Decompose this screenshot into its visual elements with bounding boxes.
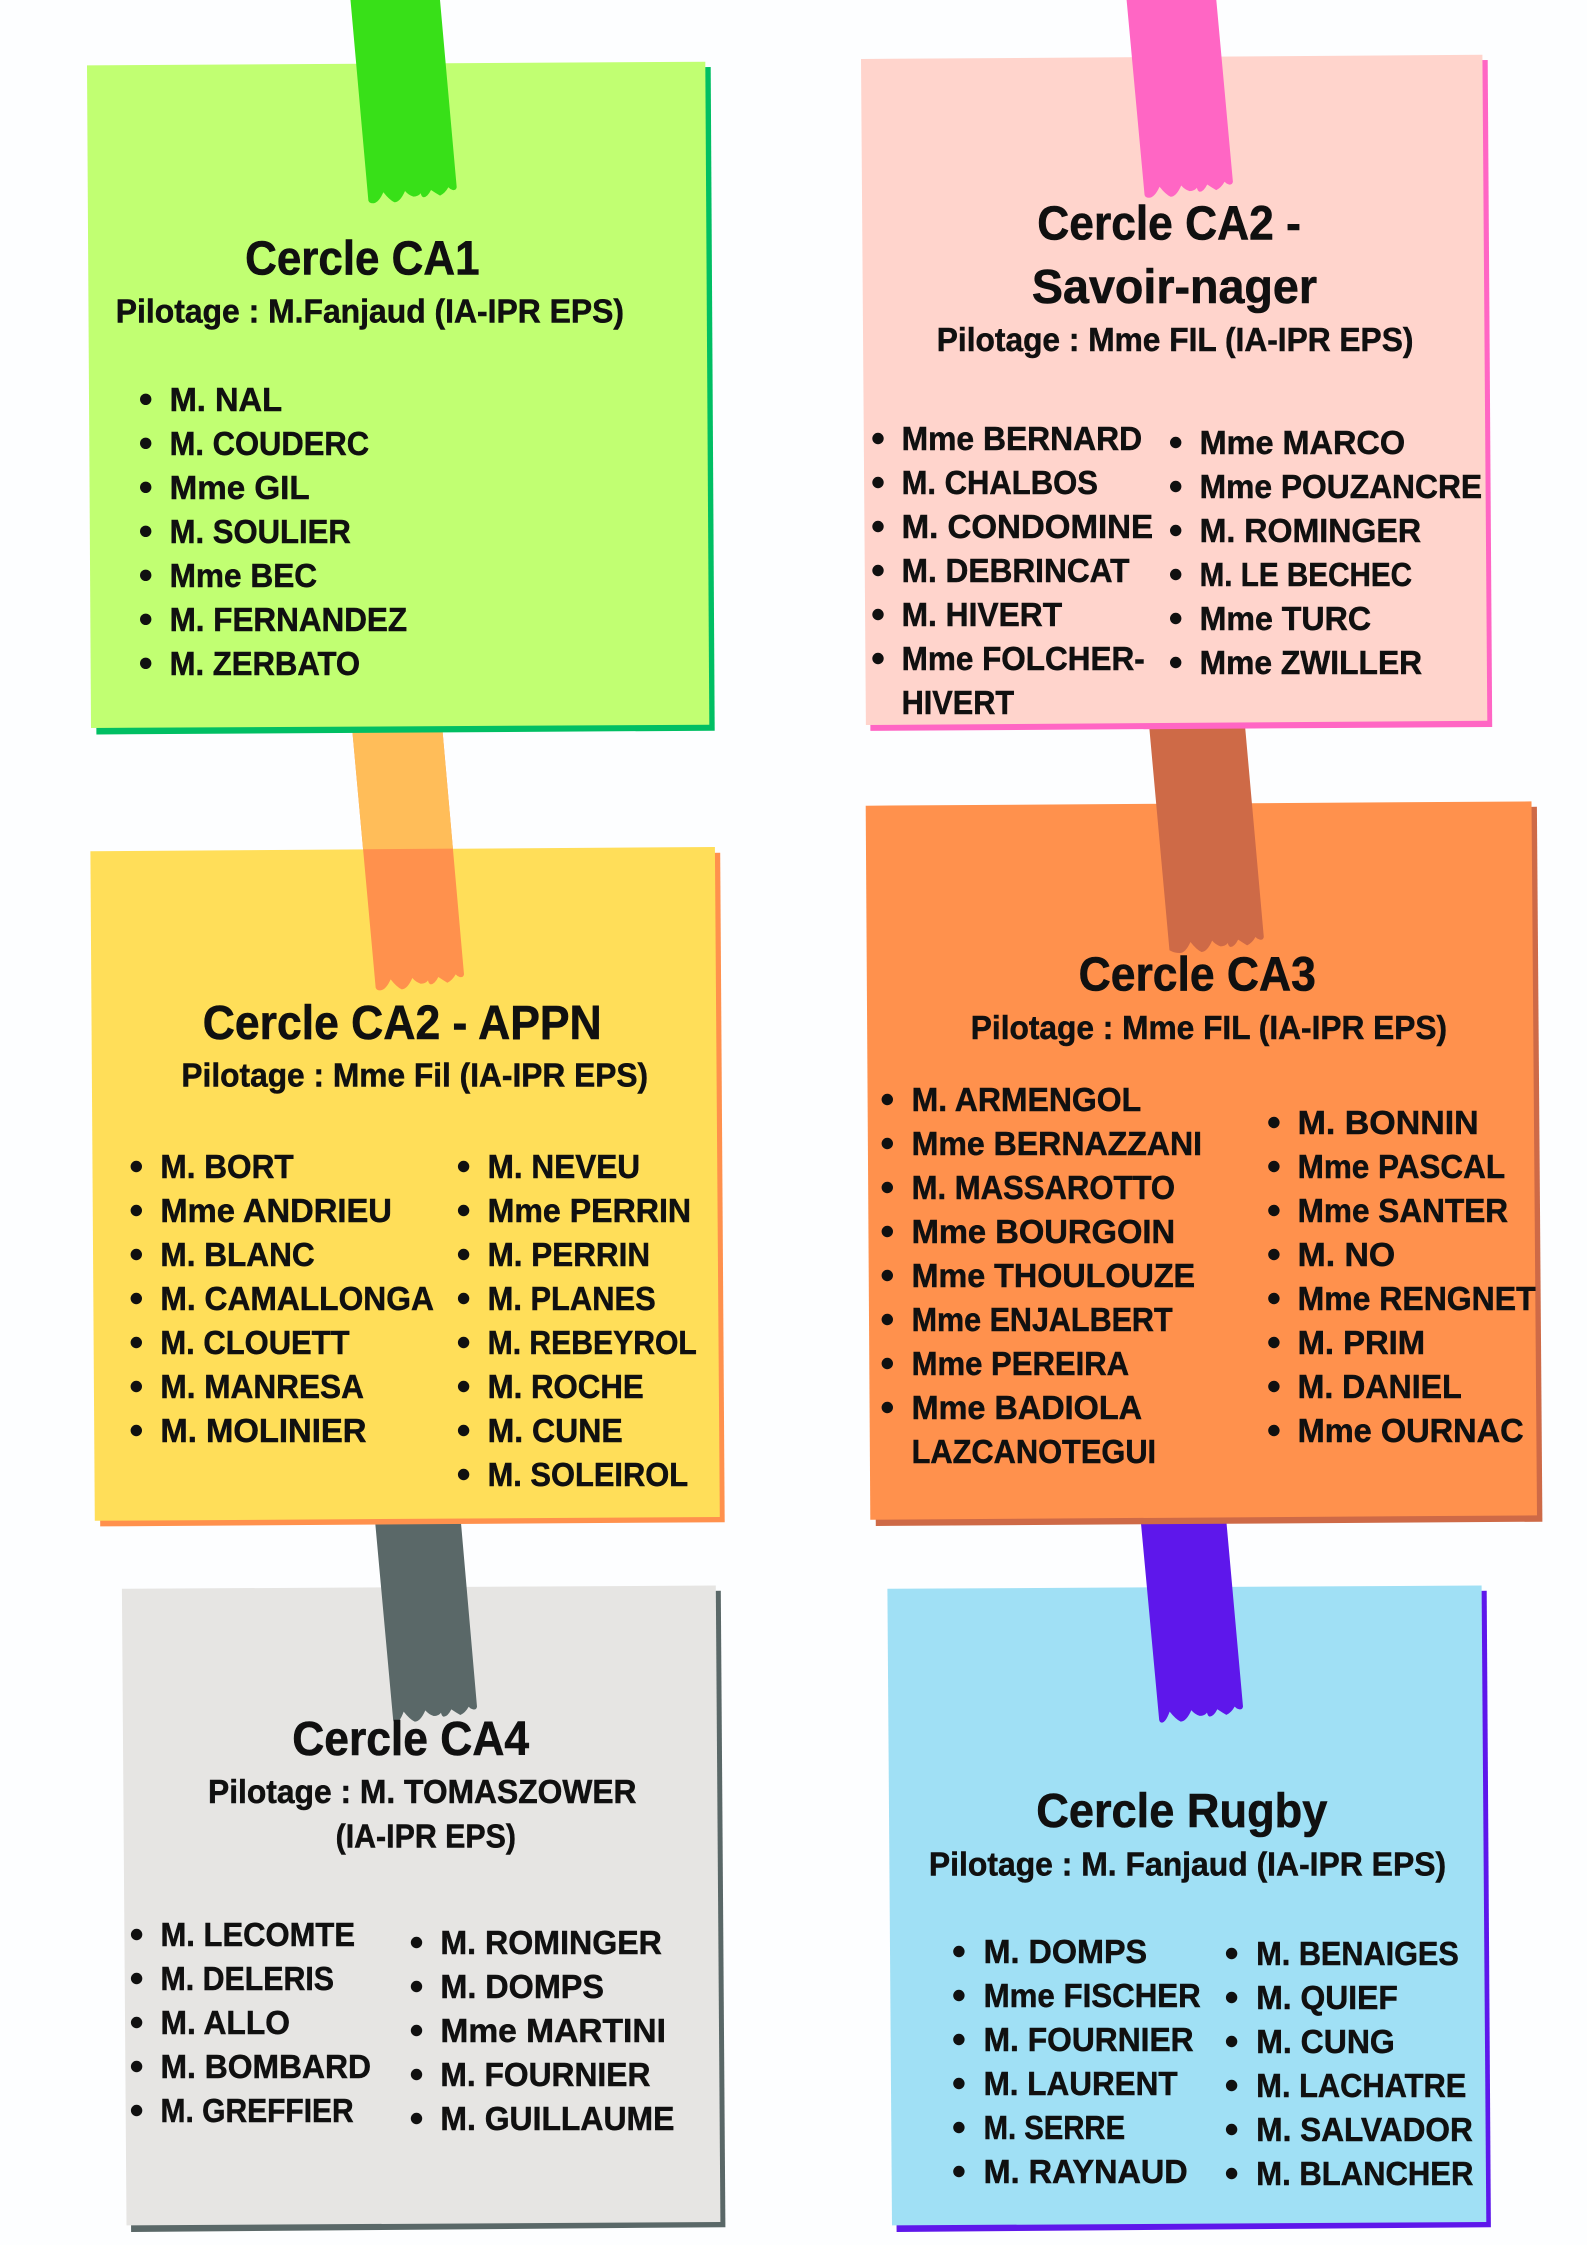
heading: Cercle Rugby: Cercle Rugby: [1036, 1785, 1328, 1838]
list: Savoir-nager right column: M. ROMINGER: [1200, 512, 1421, 549]
icon: tape CA4: [374, 1515, 477, 1723]
text: pilotage Savoir-nager: Pilotage : Mme FIL (IA-IPR EPS): [937, 321, 1413, 358]
list: CA4 right column: M. ROMINGER: [440, 1924, 662, 1961]
list: CA4 right column: M. DOMPS: [440, 1968, 604, 2005]
list: Rugby right column: M. CUNG: [1256, 2023, 1395, 2060]
heading: Cercle CA2 - Savoir-nager: Cercle CA2 -: [1037, 198, 1301, 250]
list: Savoir-nager left column: HIVERT: [902, 684, 1014, 721]
list: Rugby left column: M. SERRE: [984, 2109, 1125, 2146]
list: APPN left column: [131, 1148, 434, 1449]
list: Rugby right column: M. SALVADOR: [1256, 2111, 1473, 2148]
icon: tape Rugby: [1140, 1515, 1243, 1723]
list: Savoir-nager left column: M. CHALBOS: [902, 464, 1098, 501]
list: CA3 left column: Mme BERNAZZANI: [912, 1125, 1202, 1162]
list: CA4 right column: [411, 1924, 674, 2137]
heading: Cercle CA2 - APPN: Cercle CA2 - APPN: [203, 997, 602, 1050]
list: CA4 left column: M. DELERIS: [160, 1960, 334, 1997]
list: Rugby right column: [1226, 1935, 1474, 2192]
heading: Cercle CA3: Cercle CA3: [1079, 948, 1316, 1002]
text: pilotage Rugby: Pilotage : M. Fanjaud (IA-IPR EPS): [929, 1845, 1446, 1882]
text: pilotage CA3: Pilotage : Mme FIL (IA-IPR EPS): [971, 1009, 1447, 1046]
list: APPN right column: M. PLANES: [488, 1280, 656, 1317]
list: Rugby right column: M. QUIEF: [1256, 1979, 1398, 2016]
list: CA3 left column: Mme ENJALBERT: [912, 1301, 1173, 1338]
list: CA4 left column: M. GREFFIER: [160, 2092, 354, 2129]
list: CA3 right column: M. DANIEL: [1298, 1368, 1462, 1405]
list: CA1 members: [140, 381, 407, 682]
list: Rugby left column: M. FOURNIER: [984, 2021, 1194, 2058]
list: Rugby right column: M. BLANCHER: [1256, 2155, 1474, 2192]
list: CA3 right column: Mme RENGNET: [1298, 1280, 1536, 1317]
list: CA3 right column: M. BONNIN: [1298, 1104, 1479, 1141]
list: CA3 right column: [1268, 1104, 1536, 1449]
list: CA3 right column: Mme OURNAC: [1298, 1412, 1524, 1449]
list: Rugby left column: Mme FISCHER: [984, 1977, 1201, 2014]
list: Rugby right column: M. LACHATRE: [1256, 2067, 1466, 2104]
text: pilotage CA4: Pilotage : M. TOMASZOWER: [208, 1773, 637, 1810]
panel: Cercle CA1: [87, 0, 715, 734]
list: CA3 left column: M. ARMENGOL: [912, 1081, 1141, 1118]
list: CA3 left column: Mme BOURGOIN: [912, 1213, 1175, 1250]
panel: Cercle CA3: [866, 720, 1542, 1526]
heading: Cercle CA1: Cercle CA1: [245, 232, 480, 285]
list: CA1 members: M. COUDERC: [170, 425, 369, 462]
list: CA4 left column: [131, 1916, 371, 2129]
list: APPN left column: M. CAMALLONGA: [160, 1280, 434, 1317]
heading: Cercle CA4: Cercle CA4: [292, 1713, 529, 1766]
list: Savoir-nager left column: [872, 420, 1153, 721]
list: CA1 members: M. SOULIER: [170, 513, 351, 550]
list: CA3 left column: Mme THOULOUZE: [912, 1257, 1195, 1294]
list: APPN right column: M. REBEYROL: [488, 1324, 697, 1361]
list: APPN left column: M. CLOUETT: [160, 1324, 350, 1361]
heading: Cercle CA2 - Savoir-nager: [1032, 198, 1317, 314]
list: CA1 members: M. NAL: [170, 381, 282, 418]
heading: Cercle CA2 - Savoir-nager: Savoir-nager: [1032, 261, 1317, 314]
panel: Cercle CA2 - APPN: [90, 725, 725, 1526]
text: pilotage CA1: Pilotage : M.Fanjaud (IA-IPR EPS): [116, 292, 624, 329]
list: APPN left column: M. MOLINIER: [160, 1412, 367, 1449]
list: Rugby left column: [953, 1933, 1201, 2190]
panel: Cercle Rugby: [887, 1515, 1491, 2232]
list: APPN right column: M. SOLEIROL: [488, 1456, 688, 1493]
list: CA3 left column: [882, 1081, 1202, 1470]
list: APPN right column: Mme PERRIN: [488, 1192, 691, 1229]
list: CA3 left column: Mme PEREIRA: [912, 1345, 1129, 1382]
list: CA4 left column: M. ALLO: [160, 2004, 290, 2041]
list: CA4 right column: Mme MARTINI: [440, 2012, 666, 2049]
list: CA1 members: Mme GIL: [170, 469, 310, 506]
list: APPN right column: [458, 1148, 697, 1493]
panel: Cercle CA2 - Savoir-nager: [861, 0, 1492, 731]
list: APPN right column: M. ROCHE: [488, 1368, 644, 1405]
icon: tape CA3: [1149, 720, 1264, 953]
list: Savoir-nager right column: M. LE BECHEC: [1200, 556, 1412, 593]
list: Savoir-nager left column: Mme FOLCHER-: [902, 640, 1145, 677]
list: Savoir-nager right column: [1170, 424, 1482, 681]
list: Rugby left column: M. RAYNAUD: [984, 2153, 1188, 2190]
list: CA3 left column: LAZCANOTEGUI: [912, 1433, 1156, 1470]
list: CA1 members: M. ZERBATO: [170, 645, 360, 682]
list: Savoir-nager left column: M. HIVERT: [902, 596, 1062, 633]
list: CA4 right column: M. GUILLAUME: [440, 2100, 674, 2137]
list: Savoir-nager right column: Mme MARCO: [1200, 424, 1405, 461]
panel: Cercle CA4: [122, 1515, 725, 2232]
list: Savoir-nager right column: Mme TURC: [1200, 600, 1371, 637]
list: Rugby left column: M. DOMPS: [984, 1933, 1147, 1970]
list: CA3 left column: Mme BADIOLA: [912, 1389, 1142, 1426]
list: CA4 left column: M. LECOMTE: [160, 1916, 355, 1953]
list: Rugby left column: M. LAURENT: [984, 2065, 1178, 2102]
text: pilotage APPN: Pilotage : Mme Fil (IA-IPR EPS): [181, 1057, 648, 1094]
list: APPN right column: M. PERRIN: [488, 1236, 650, 1273]
text: pilotage CA4: (IA-IPR EPS): [336, 1817, 516, 1854]
list: APPN right column: M. CUNE: [488, 1412, 623, 1449]
list: CA3 right column: M. PRIM: [1298, 1324, 1425, 1361]
list: Savoir-nager left column: Mme BERNARD: [902, 420, 1142, 457]
list: Rugby right column: M. BENAIGES: [1256, 1935, 1459, 1972]
text: pilotage CA4: [208, 1773, 637, 1854]
icon: tape Savoir-nager: [1127, 0, 1233, 198]
list: APPN left column: Mme ANDRIEU: [160, 1192, 392, 1229]
list: APPN left column: M. BORT: [160, 1148, 294, 1185]
list: APPN right column: M. NEVEU: [488, 1148, 640, 1185]
list: CA4 left column: M. BOMBARD: [160, 2048, 371, 2085]
list: CA1 members: M. FERNANDEZ: [170, 601, 407, 638]
list: CA3 right column: Mme SANTER: [1298, 1192, 1508, 1229]
list: CA3 right column: Mme PASCAL: [1298, 1148, 1505, 1185]
list: CA1 members: Mme BEC: [170, 557, 317, 594]
list: Savoir-nager right column: Mme POUZANCRE: [1200, 468, 1482, 505]
list: CA3 right column: M. NO: [1298, 1236, 1395, 1273]
list: Savoir-nager right column: Mme ZWILLER: [1200, 644, 1422, 681]
list: CA4 right column: M. FOURNIER: [440, 2056, 651, 2093]
icon: tape APPN: [352, 725, 464, 990]
list: APPN left column: M. BLANC: [160, 1236, 315, 1273]
list: Savoir-nager left column: M. DEBRINCAT: [902, 552, 1130, 589]
list: APPN left column: M. MANRESA: [160, 1368, 364, 1405]
icon: tape CA1: [350, 0, 457, 203]
list: CA3 left column: M. MASSAROTTO: [912, 1169, 1175, 1206]
list: Savoir-nager left column: M. CONDOMINE: [902, 508, 1153, 545]
